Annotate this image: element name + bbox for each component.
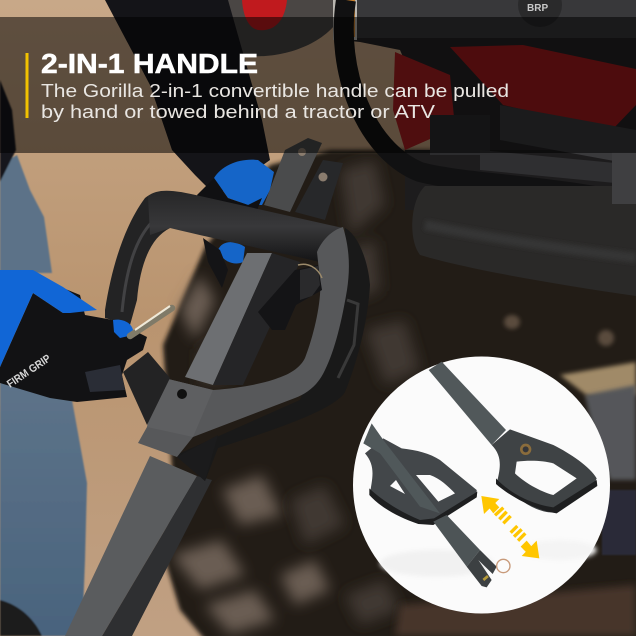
inset circle bbox=[353, 356, 610, 614]
shadow bbox=[380, 550, 493, 577]
main pole bbox=[65, 253, 300, 636]
arrows bbox=[481, 496, 539, 558]
front frame bbox=[138, 227, 349, 457]
tail lamp bbox=[450, 45, 636, 130]
right-side machinery bbox=[560, 362, 636, 398]
far fingers bbox=[258, 264, 322, 330]
vehicle rear: BRP bbox=[527, 3, 548, 14]
back shell bbox=[176, 228, 370, 481]
banner bbox=[0, 17, 636, 153]
left lamp housing bbox=[228, 0, 340, 56]
inset products bbox=[363, 362, 597, 587]
accent bar bbox=[26, 53, 28, 118]
pin bbox=[130, 306, 172, 336]
hose bbox=[344, 0, 636, 205]
person: sleeve and far hand bbox=[105, 0, 274, 288]
top grip bbox=[148, 191, 346, 262]
left handle bbox=[363, 423, 510, 587]
ground bottom right bbox=[395, 585, 636, 636]
left upright bbox=[105, 192, 185, 325]
person: jeans bbox=[0, 80, 87, 636]
description: by hand or towed behind a tractor or ATV bbox=[41, 102, 435, 122]
badge bbox=[518, 0, 562, 27]
heading: 2-IN-1 HANDLE bbox=[41, 48, 258, 79]
hex ribs bbox=[338, 300, 358, 378]
description: The Gorilla 2-in-1 convertible handle can be pulled bbox=[41, 81, 509, 101]
main handle bbox=[105, 191, 370, 481]
near glove bbox=[0, 270, 147, 402]
tire bbox=[163, 150, 636, 636]
description bbox=[41, 81, 509, 122]
glove label: FIRM GRIP bbox=[5, 353, 53, 390]
vehicle rear bbox=[228, 0, 636, 555]
right handle bbox=[429, 362, 597, 513]
muffler bbox=[412, 186, 636, 296]
handle plates bbox=[264, 138, 343, 220]
